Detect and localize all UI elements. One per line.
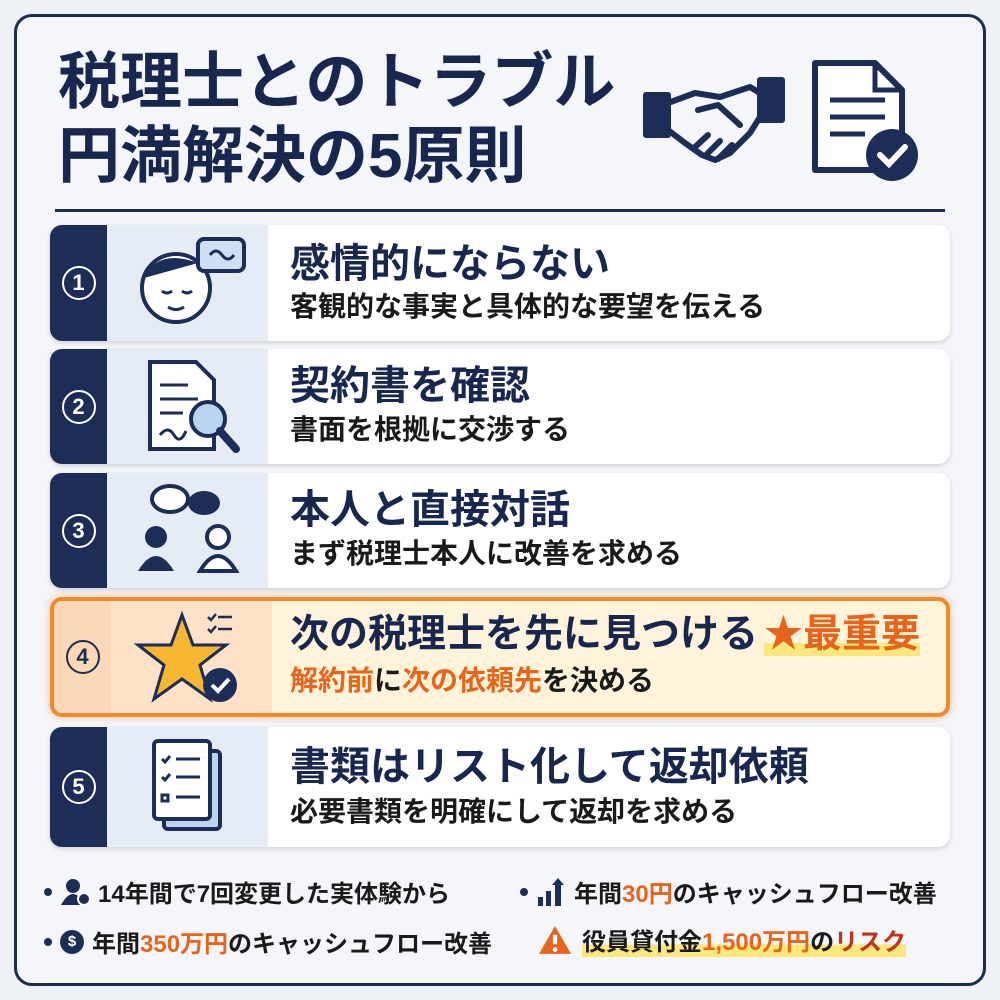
footer item 3: 350万円 [140,931,228,958]
title: 円満解決の5原則 [58,122,526,191]
icon: contract magnifier [107,349,268,464]
sub 4: 解約前に次の依頼先を決める [290,665,654,696]
row 5 [50,727,950,847]
sub 5: 必要書類を明確にして返却を求める [290,796,737,827]
heading 2: 契約書を確認 [290,364,530,408]
footer item 2: 年間 のキャッシュフロー改善 [574,881,937,908]
icon: calm face [107,225,268,341]
footer item 3: $ [68,932,76,950]
icon: handshake and document [643,60,918,181]
heading 4: 次の税理士を先に見つける★最重要 [290,613,920,656]
row 1: 1 [72,270,85,295]
icon: checklist documents [107,727,268,847]
row 2 [50,349,950,464]
icon: star with check [111,601,272,713]
row 4 highlighted [50,597,950,717]
row 5: 5 [72,774,85,799]
sub 1: 客観的な事実と具体的な要望を伝える [290,291,765,322]
icon: handshake [646,80,782,160]
sub 2: 書面を根拠に交渉する [290,414,570,445]
footer item 2: 30円 [622,881,673,908]
footer item 3: 年間 のキャッシュフロー改善 [92,931,492,958]
row 3 [50,473,950,588]
sub 3: まず税理士本人に改善を求める [290,538,682,569]
icon: two people talking [107,473,268,588]
footer item 1: 14年間で7回変更した実体験から [98,881,450,908]
row 1 [50,225,950,341]
row 2: 2 [72,394,85,418]
icon: document with check [815,63,918,181]
title [58,48,615,191]
row 4 highlighted: 4 [76,644,89,669]
heading 3: 本人と直接対話 [290,488,570,532]
heading 1: 感情的にならない [290,242,610,286]
title: 税理士とのトラブル [58,48,615,117]
row 3: 3 [72,518,85,542]
footer item 4: 役員貸付金1,500万円のリスク [582,929,906,956]
heading 5: 書類はリスト化して返却依頼 [290,745,809,789]
